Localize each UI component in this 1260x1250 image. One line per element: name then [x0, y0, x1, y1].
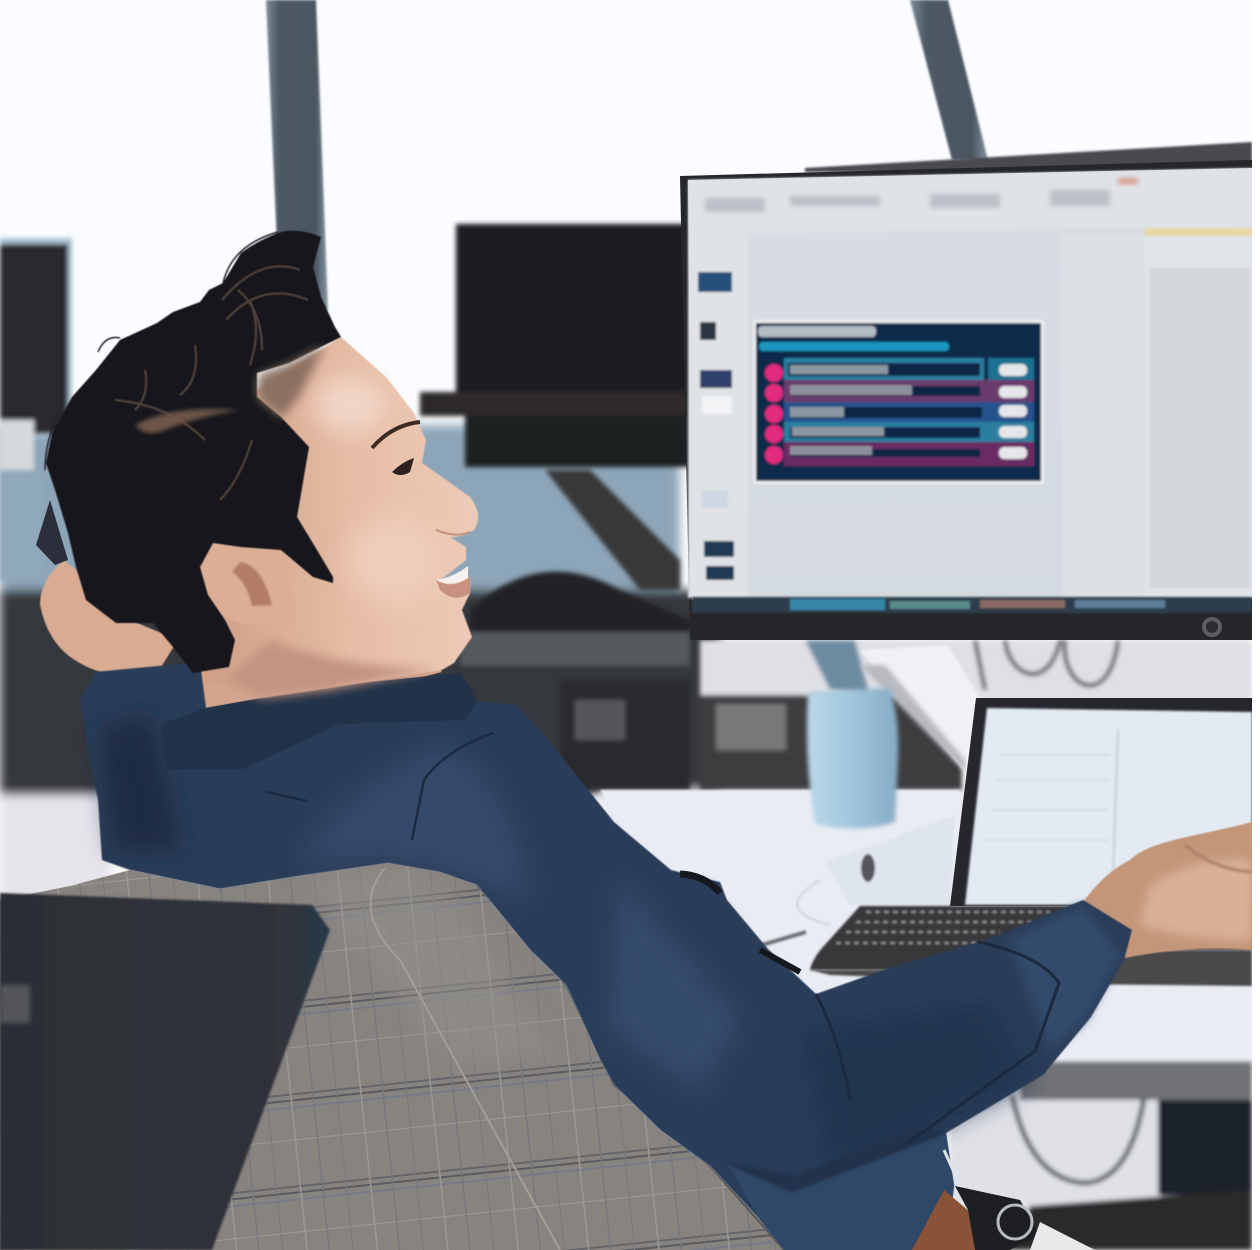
lips [436, 577, 470, 598]
shirt shading [100, 715, 180, 850]
hair [45, 231, 341, 673]
ear inner [232, 562, 272, 606]
notes side panel [1062, 226, 1252, 599]
monitor bezel [680, 160, 1252, 640]
nose shadow [436, 530, 470, 535]
jacket shading [300, 864, 560, 1060]
eye [392, 458, 414, 475]
slide title [758, 326, 876, 337]
center background monitor [420, 224, 700, 790]
hair part [135, 409, 240, 433]
jacket fabric [0, 850, 800, 1250]
shirt [80, 662, 1132, 1250]
shirt body and arm [80, 662, 1132, 1250]
thumbnail panel [688, 234, 748, 598]
keyboard keys [836, 912, 1050, 943]
white edge [944, 1150, 962, 1190]
hair strands [45, 232, 278, 470]
taskbar [692, 597, 1252, 613]
plaid jacket on chair [0, 850, 800, 1250]
desk surface [599, 788, 960, 798]
sleeve folds [680, 874, 1059, 1145]
ribbon details [705, 178, 1138, 212]
area under main monitor [700, 640, 1252, 790]
window mullion right [910, 0, 988, 160]
hand gesturing [1083, 822, 1252, 958]
white badge [1030, 1222, 1095, 1250]
laptop frame [950, 698, 1252, 906]
belt and watch items [912, 1150, 1095, 1250]
jacket fold [371, 868, 560, 1250]
shoulder seam [267, 733, 493, 840]
laptop screen spreadsheet [986, 730, 1120, 871]
laptop screen [965, 708, 1252, 905]
man [36, 231, 1132, 1250]
left background monitor [0, 238, 72, 580]
face [200, 337, 478, 698]
clasp ring [998, 1205, 1032, 1239]
hair highlights [115, 266, 308, 500]
water bottle [807, 688, 898, 829]
forehead highlight [314, 377, 386, 433]
hair mass [46, 231, 341, 673]
slide number bullets [765, 364, 783, 464]
monitor top stand bar [805, 142, 1252, 172]
slide rows [784, 358, 1034, 466]
jaw shadow [225, 640, 440, 698]
application ribbon [688, 168, 1252, 234]
monitor arm shadow [860, 665, 965, 772]
black strap with clasp [955, 1186, 1040, 1250]
head [45, 231, 478, 698]
lower torso panel [727, 1133, 954, 1250]
under-desk area [950, 1062, 1252, 1250]
sleeve underside shadow [720, 1125, 946, 1192]
phone or cuff behind head [36, 500, 68, 565]
main monitor [680, 142, 1252, 640]
cable and items on desk [762, 815, 955, 945]
slide subtitle [759, 342, 949, 351]
background desks blurred [0, 425, 1260, 1090]
foreground reflection [0, 985, 30, 1023]
ear [200, 542, 296, 626]
keyboard [810, 906, 1252, 970]
slide on screen [753, 320, 1044, 484]
neck [195, 640, 442, 725]
background: bright window [0, 0, 1252, 450]
hand behind head [40, 560, 178, 675]
monitor screen [688, 168, 1252, 600]
eyebrow [372, 422, 420, 448]
foreground dark monitor [0, 893, 330, 1250]
laptop [810, 698, 1252, 986]
thinning hair at temple [258, 345, 325, 418]
mouth [436, 566, 468, 584]
collar [162, 673, 477, 769]
hp logo [1202, 617, 1222, 637]
cheek highlight [349, 515, 441, 605]
window mullion left [266, 0, 328, 310]
brown leather strap [912, 1190, 975, 1250]
monitor arm [860, 645, 978, 772]
jacket edge [477, 885, 784, 1250]
laptop base [810, 950, 1252, 986]
